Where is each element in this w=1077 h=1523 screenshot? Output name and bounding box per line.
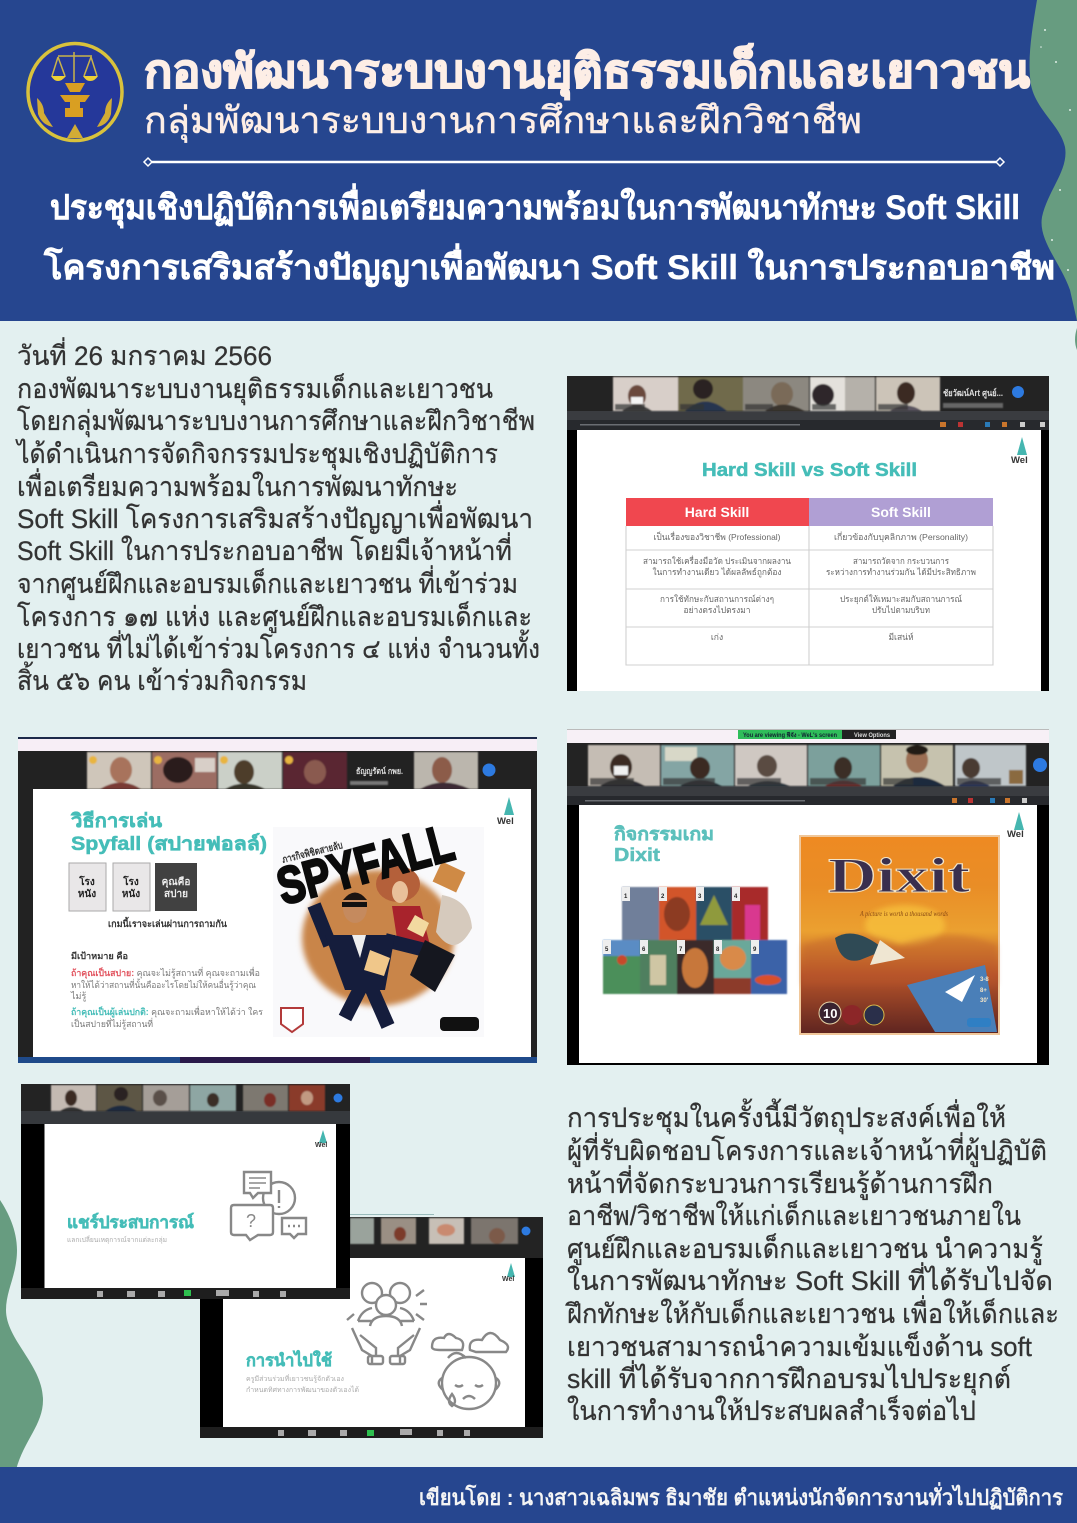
game box: Dixit [800,836,999,1034]
next arrow button [522,1226,530,1236]
slide heading: การนำไปใช้ [246,1350,332,1370]
comparison table: สามารถวัดจาก กระบวนการ [853,556,949,566]
slide [44,1124,336,1288]
text block: intro paragraph: Soft Skill ในการประกอบอาชีพ โดยมีเจ้าหน้าที่ [17,532,512,566]
logo mark [315,1130,327,1149]
logo mark: Wel [1011,455,1028,466]
logo mark: Wel [1007,829,1024,840]
comparison table: ระหว่างการทำงานร่วมกัน ได้มีประสิทธิภาพ [826,567,976,577]
caption: เกมนี้เราจะเล่นผ่านการถามกัน [108,916,227,930]
slide [33,789,531,1057]
comparison table [626,498,993,665]
card numbers: 4 [734,894,738,900]
slide caption: กำหนดทิศทางการพัฒนาของตัวเองได้ [246,1385,359,1394]
viewing banner [738,730,896,739]
man in suit [314,905,425,1026]
role cards: หนัง [78,888,96,900]
text block: intro paragraph [15,337,540,696]
logo mark [1011,437,1028,466]
logo mark [502,1263,515,1283]
video tiles [350,1218,518,1244]
decorative blob: right green edge [1075,328,1077,350]
screenshot: แชร์ประสบการณ์ (front) [21,1084,350,1299]
text block: objectives paragraph: ผู้ที่รับผิดชอบโครงการและเจ้าหน้าที่ผู้ปฏิบัติ [567,1132,1047,1167]
viewing banner: View Options [854,733,891,739]
game art: Spyfall [271,814,484,1037]
next arrow button [334,1094,342,1102]
text block: intro paragraph: กองพัฒนาระบบงานยุติธรรมเด็กและเยาวชน [17,371,493,406]
icon: people in hands [347,1283,427,1364]
zoom toolbar [97,1290,286,1297]
woman [376,866,420,902]
text block: objectives paragraph: ฝึกทักษะให้กับเด็กและเยาวชน เพื่อให้เด็กและ [565,1295,1059,1329]
text block: objectives paragraph [565,1098,1059,1426]
goal text: มีเป้าหมาย คือ [71,950,128,961]
slide [223,1258,525,1427]
screenshot: Dixit [567,729,1049,1065]
browser bar [585,798,1027,803]
role cards: โรง [78,875,95,888]
role cards: สปาย [164,888,188,900]
slide heading [614,824,714,865]
comparison table: Soft Skill [871,504,931,520]
card numbers: 8 [716,947,720,953]
screenshot: Spyfall [18,737,537,1063]
cat and parcel [436,895,472,945]
card numbers: 7 [679,947,683,953]
logo mark: Wel [502,1276,514,1283]
text block: objectives paragraph: skill ที่ได้รับจากการฝึกอบรมไปประยุกต์ [567,1360,1011,1396]
comparison table: เกี่ยวข้องกับบุคลิกภาพ (Personality) [834,531,968,543]
participant name: ชัยวัฒน์Art ศูนย์... [943,387,1003,399]
slide caption: แลกเปลี่ยนเหตุการณ์จากแต่ละกลุ่ม [67,1235,167,1244]
title: กองพัฒนาระบบงานยุติธรรมเด็กและเยาวชน [144,43,1031,100]
briefcase [410,940,455,992]
game logo text: SPYFALL [271,814,460,917]
goal text: ถ้าคุณเป็นผู้เล่นปกติ: คุณจะถามเพื่อหาให้ได้ว่า ใคร [71,1005,263,1018]
slide heading: แชร์ประสบการณ์ [67,1212,194,1232]
screenshot: การนำไปใช้ (back) [200,1214,543,1438]
icon question mark: ? [246,1211,256,1231]
goal text [70,950,263,1030]
game cards [603,887,787,994]
role cards [69,863,197,911]
goal text: หาให้ได้ว่าสถานที่นั้นคืออะไรโดยไม่ให้คนอื่นรู้ว่าคุณ [71,978,256,991]
slide heading [71,810,267,855]
game box: Dixit: Dixit [828,847,970,903]
slide heading: กิจกรรมเกม [614,824,714,844]
comparison table: ปรับไปตามบริบท [872,605,930,615]
comparison table: การใช้ทักษะกับสถานการณ์ต่างๆ [660,594,774,604]
game art: Spyfall: ภารกิจพิชิตสายลับ [281,839,344,866]
slide heading: Dixit [614,845,660,865]
text block: objectives paragraph: การประชุมในครั้งนี้มีวัตถุประสงค์เพื่อให้ [567,1098,1006,1135]
next arrow button [1033,758,1047,772]
slide heading: Spyfall (สปายฟอลล์) [71,833,267,855]
game box: Dixit: 10 [823,1006,837,1021]
slide caption: ครูมีส่วนร่วมที่เยาวชนรู้จักตัวเอง [246,1374,344,1383]
text block: objectives paragraph: ศูนย์ฝึกและอบรมเด็กและเยาวชน นำความรู้ [567,1231,1043,1265]
text block: intro paragraph: โดยกลุ่มพัฒนาระบบงานการศึกษาและฝึกวิชาชีพ [17,406,535,438]
goal text: เป็นสปายที่ไม่รู้สถานที่ [71,1017,153,1030]
card numbers: 2 [661,894,665,900]
card numbers: 3 [698,894,702,900]
text block: objectives paragraph: หน้าที่จัดกระบวนการเรียนรู้ด้านการฝึก [567,1165,993,1200]
role cards: คุณคือ [162,876,190,888]
comparison table: ในการทำงานเดียว ได้ผลลัพธ์ถูกต้อง [652,567,782,578]
game box: Dixit: 30' [980,998,989,1004]
goal text: ไม่รู้ [70,991,86,1002]
subtitle: กลุ่มพัฒนาระบบงานการศึกษาและฝึกวิชาชีพ [144,100,862,143]
text block: intro paragraph: ได้ดำเนินการจัดกิจกรรมประชุมเชิงปฏิบัติการ [15,439,498,471]
text block: intro paragraph: โครงการ ๑๗ แห่ง และศูนย์ฝึกและอบรมเด็กและ [17,599,532,633]
game box: Dixit: 3-8 [980,977,989,983]
screenshot: Hard Skill vs Soft Skill [567,376,1049,691]
card numbers: 5 [605,947,609,953]
slide [579,805,1037,1063]
text block: intro paragraph: วันที่ 26 มกราคม 2566 [17,337,272,371]
card numbers: 9 [753,947,757,953]
goal text: ถ้าคุณเป็นสปาย: คุณจะไม่รู้สถานที่ คุณจะถามเพื่อ [71,966,260,979]
icon: speech bubbles [231,1172,306,1240]
video tiles [87,752,478,789]
browser bar [580,422,1045,427]
card numbers: 6 [642,947,646,953]
text block: intro paragraph: เยาวชน ที่ไม่ได้เข้าร่วมโครงการ ๔ แห่ง จำนวนทั้ง [17,629,540,664]
text block: objectives paragraph: อาชีพ/วิชาชีพให้แก่เด็กและเยาวชนภายใน [567,1198,1021,1231]
icon: justice emblem [28,44,122,140]
icon: sad face with clouds [432,1333,508,1409]
heading line 1: ประชุมเชิงปฏิบัติการเพื่อเตรียมความพร้อมในการพัฒนาทักษะ Soft Skill [50,183,1020,229]
comparison table: อย่างตรงไปตรงมา [684,605,750,615]
decorative blob: left green wave [0,1200,43,1470]
comparison table: เก่ง [711,632,723,642]
next arrow button [1012,386,1024,398]
video tiles [588,745,1026,786]
zoom toolbar [278,1429,470,1436]
footer [0,1467,1077,1523]
logo mark: Wel [315,1142,327,1149]
card numbers: 1 [624,894,628,900]
text block: intro paragraph: เพื่อเตรียมความพร้อมในการพัฒนาทักษะ [17,468,458,502]
logo mark [497,797,514,827]
text block: intro paragraph: จากศูนย์ฝึกและอบรมเด็กและเยาวชน ที่เข้าร่วม [17,565,518,600]
participant name: ธัญญรัตน์ กพย. [356,766,403,777]
slide caption [246,1374,359,1394]
text block: objectives paragraph: ในการทำงานให้ประสบผลสำเร็จต่อไป [567,1393,976,1426]
publisher badge [281,1008,303,1032]
role cards: โรง [122,875,139,888]
role cards: หนัง [122,888,140,900]
heading line 2: โครงการเสริมสร้างปัญญาเพื่อพัฒนา Soft Skill ในการประกอบอาชีพ [43,243,1055,288]
text block: objectives paragraph: เยาวชนสามารถนำความเข้มแข็งด้าน soft [567,1329,1032,1362]
slide heading: Hard Skill vs Soft Skill [702,460,917,480]
comparison table: Hard Skill [685,504,749,520]
video tiles [613,377,1003,411]
header banner [0,0,1077,321]
text block: intro paragraph: สิ้น ๕๖ คน เข้าร่วมกิจกรรม [17,661,307,696]
comparison table: มีเสน่ห์ [888,632,914,642]
comparison table: ประยุกต์ให้เหมาะสมกับสถานการณ์ [840,594,962,605]
divider with diamonds [144,158,1004,166]
logo mark: Wel [497,816,514,827]
game box: Dixit: A picture is worth a thousand words [859,910,948,918]
comparison table: สามารถใช้เครื่องมือวัด ประเมินจากผลงาน [643,555,791,566]
slide [577,430,1041,691]
slide heading: วิธีการเล่น [71,810,162,832]
card numbers [603,887,759,954]
comparison table: เป็นเรื่องของวิชาชีพ (Professional) [654,531,781,542]
viewing banner: You are viewing ฟีจัง - WeL's screen [743,731,837,739]
text block: objectives paragraph: ในการพัฒนาทักษะ Soft Skill ที่ได้รับไปจัด [567,1262,1053,1296]
logo mark [1007,812,1024,840]
publisher logo [440,1017,479,1031]
game box: Dixit: 8+ [980,988,987,994]
text block: intro paragraph: Soft Skill โครงการเสริมสร้างปัญญาเพื่อพัฒนา [17,500,533,534]
video tiles [51,1085,325,1111]
next arrow button [482,764,496,776]
